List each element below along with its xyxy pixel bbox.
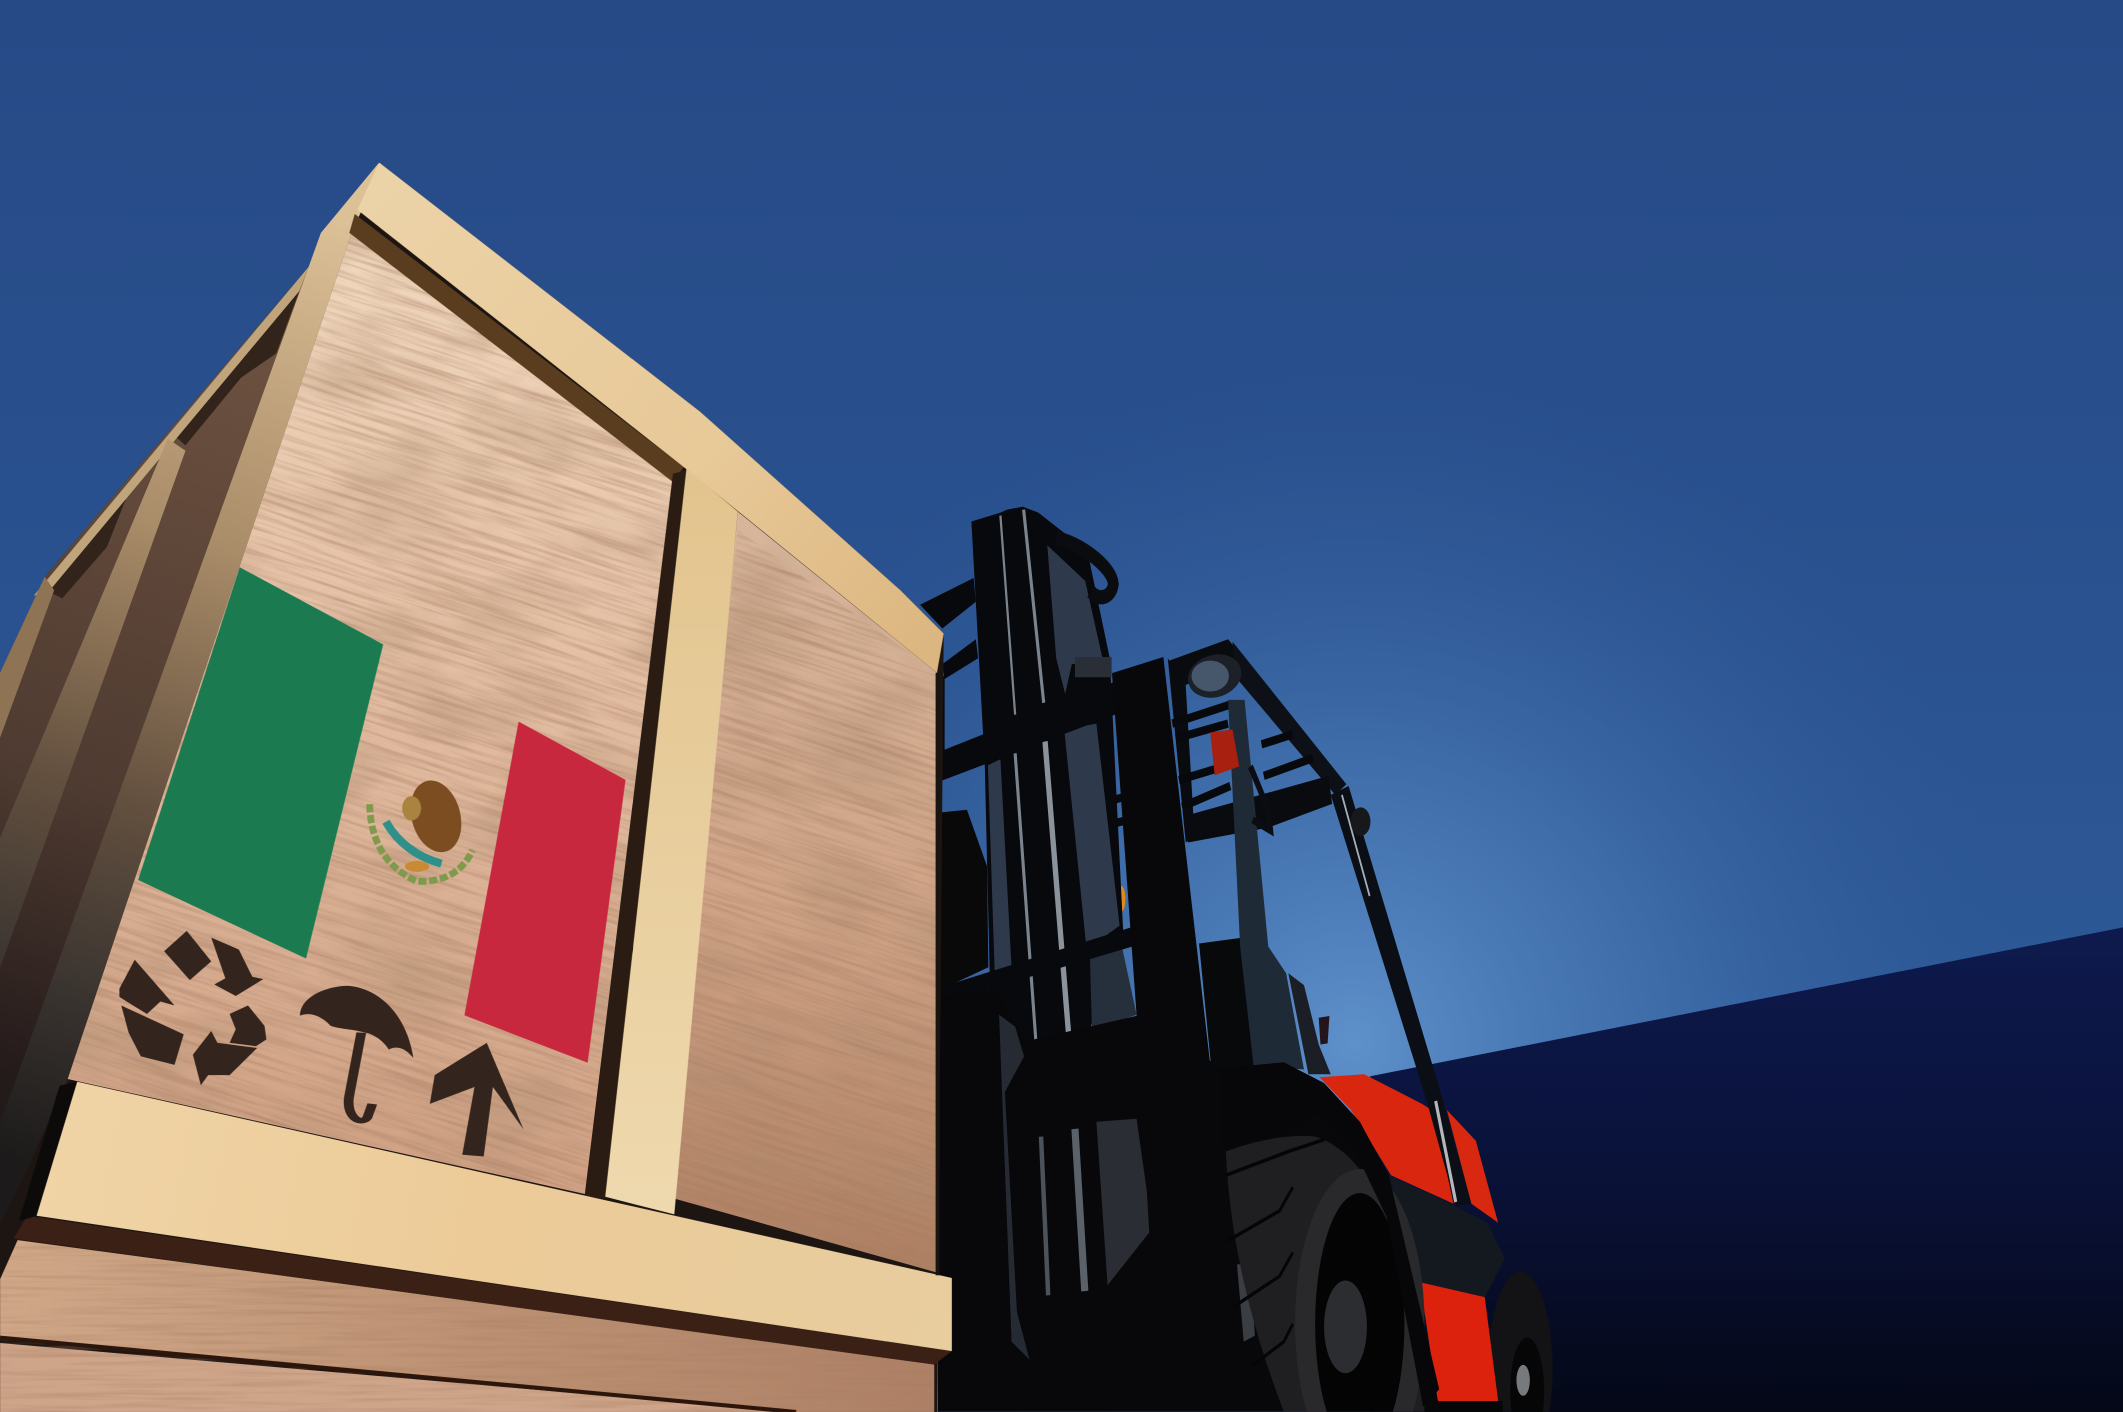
- front wheel: [1226, 1136, 1424, 1412]
- dark blue wall: [1370, 927, 2123, 1412]
- left corner post: [0, 162, 379, 1225]
- this way up arrow: [430, 1043, 523, 1156]
- flag red stripe: [464, 722, 626, 1063]
- bottom beam: [37, 1082, 952, 1351]
- forklift: [920, 507, 1553, 1412]
- chain assembly: [938, 810, 988, 991]
- grain on planks: [0, 1240, 934, 1412]
- fender: [1221, 1062, 1439, 1407]
- cross bars: [936, 682, 1139, 1004]
- wood blotches: [68, 227, 937, 1273]
- left upper frame rail: [34, 267, 309, 596]
- right plywood panel: [673, 512, 937, 1273]
- left upper recesses: [49, 291, 299, 598]
- rear crossbars: [920, 578, 978, 753]
- fork carriage upright: [1112, 657, 1255, 1360]
- work lamp and tail light: [1186, 650, 1270, 831]
- umbrella symbol: [300, 986, 413, 1121]
- left side face: [0, 233, 322, 1225]
- crate right edge shadow: [936, 673, 940, 1275]
- vertical beam: [605, 468, 738, 1214]
- beam shadow: [14, 1216, 952, 1365]
- red body: [1320, 1074, 1505, 1412]
- lower chassis mass: [938, 988, 1440, 1412]
- plank gap: [0, 1338, 796, 1412]
- post shadow beside beam: [19, 1082, 77, 1221]
- seat and lever: [1288, 973, 1331, 1074]
- mast: [971, 507, 1137, 1050]
- front left plywood panel: [68, 227, 673, 1194]
- vertical beam shadow: [585, 470, 688, 1199]
- amber indicator light: [1116, 886, 1125, 912]
- left vertical brace: [0, 439, 185, 968]
- mast grey plates: [988, 545, 1137, 1030]
- recycling symbol: [119, 931, 266, 1085]
- overhead guard: [1110, 639, 1346, 842]
- cab base and left post: [1199, 700, 1304, 1080]
- crate silhouette backing: [0, 162, 944, 1412]
- flag green stripe: [138, 567, 383, 958]
- wood grain texture: [68, 225, 1137, 1283]
- wooden crate: [0, 162, 1137, 1412]
- mast hook: [1056, 538, 1113, 597]
- bottom plank: [0, 1343, 791, 1412]
- crate symbols: [119, 931, 523, 1156]
- top beam shadow: [349, 214, 684, 482]
- lower carriage block: [999, 1015, 1152, 1360]
- rear wheel: [1488, 1272, 1553, 1412]
- lower plank: [0, 1240, 934, 1412]
- mast highlights: [1000, 510, 1069, 1045]
- flag emblem: [370, 775, 473, 881]
- top beam: [357, 162, 944, 673]
- front pillar and mirror: [1331, 786, 1471, 1206]
